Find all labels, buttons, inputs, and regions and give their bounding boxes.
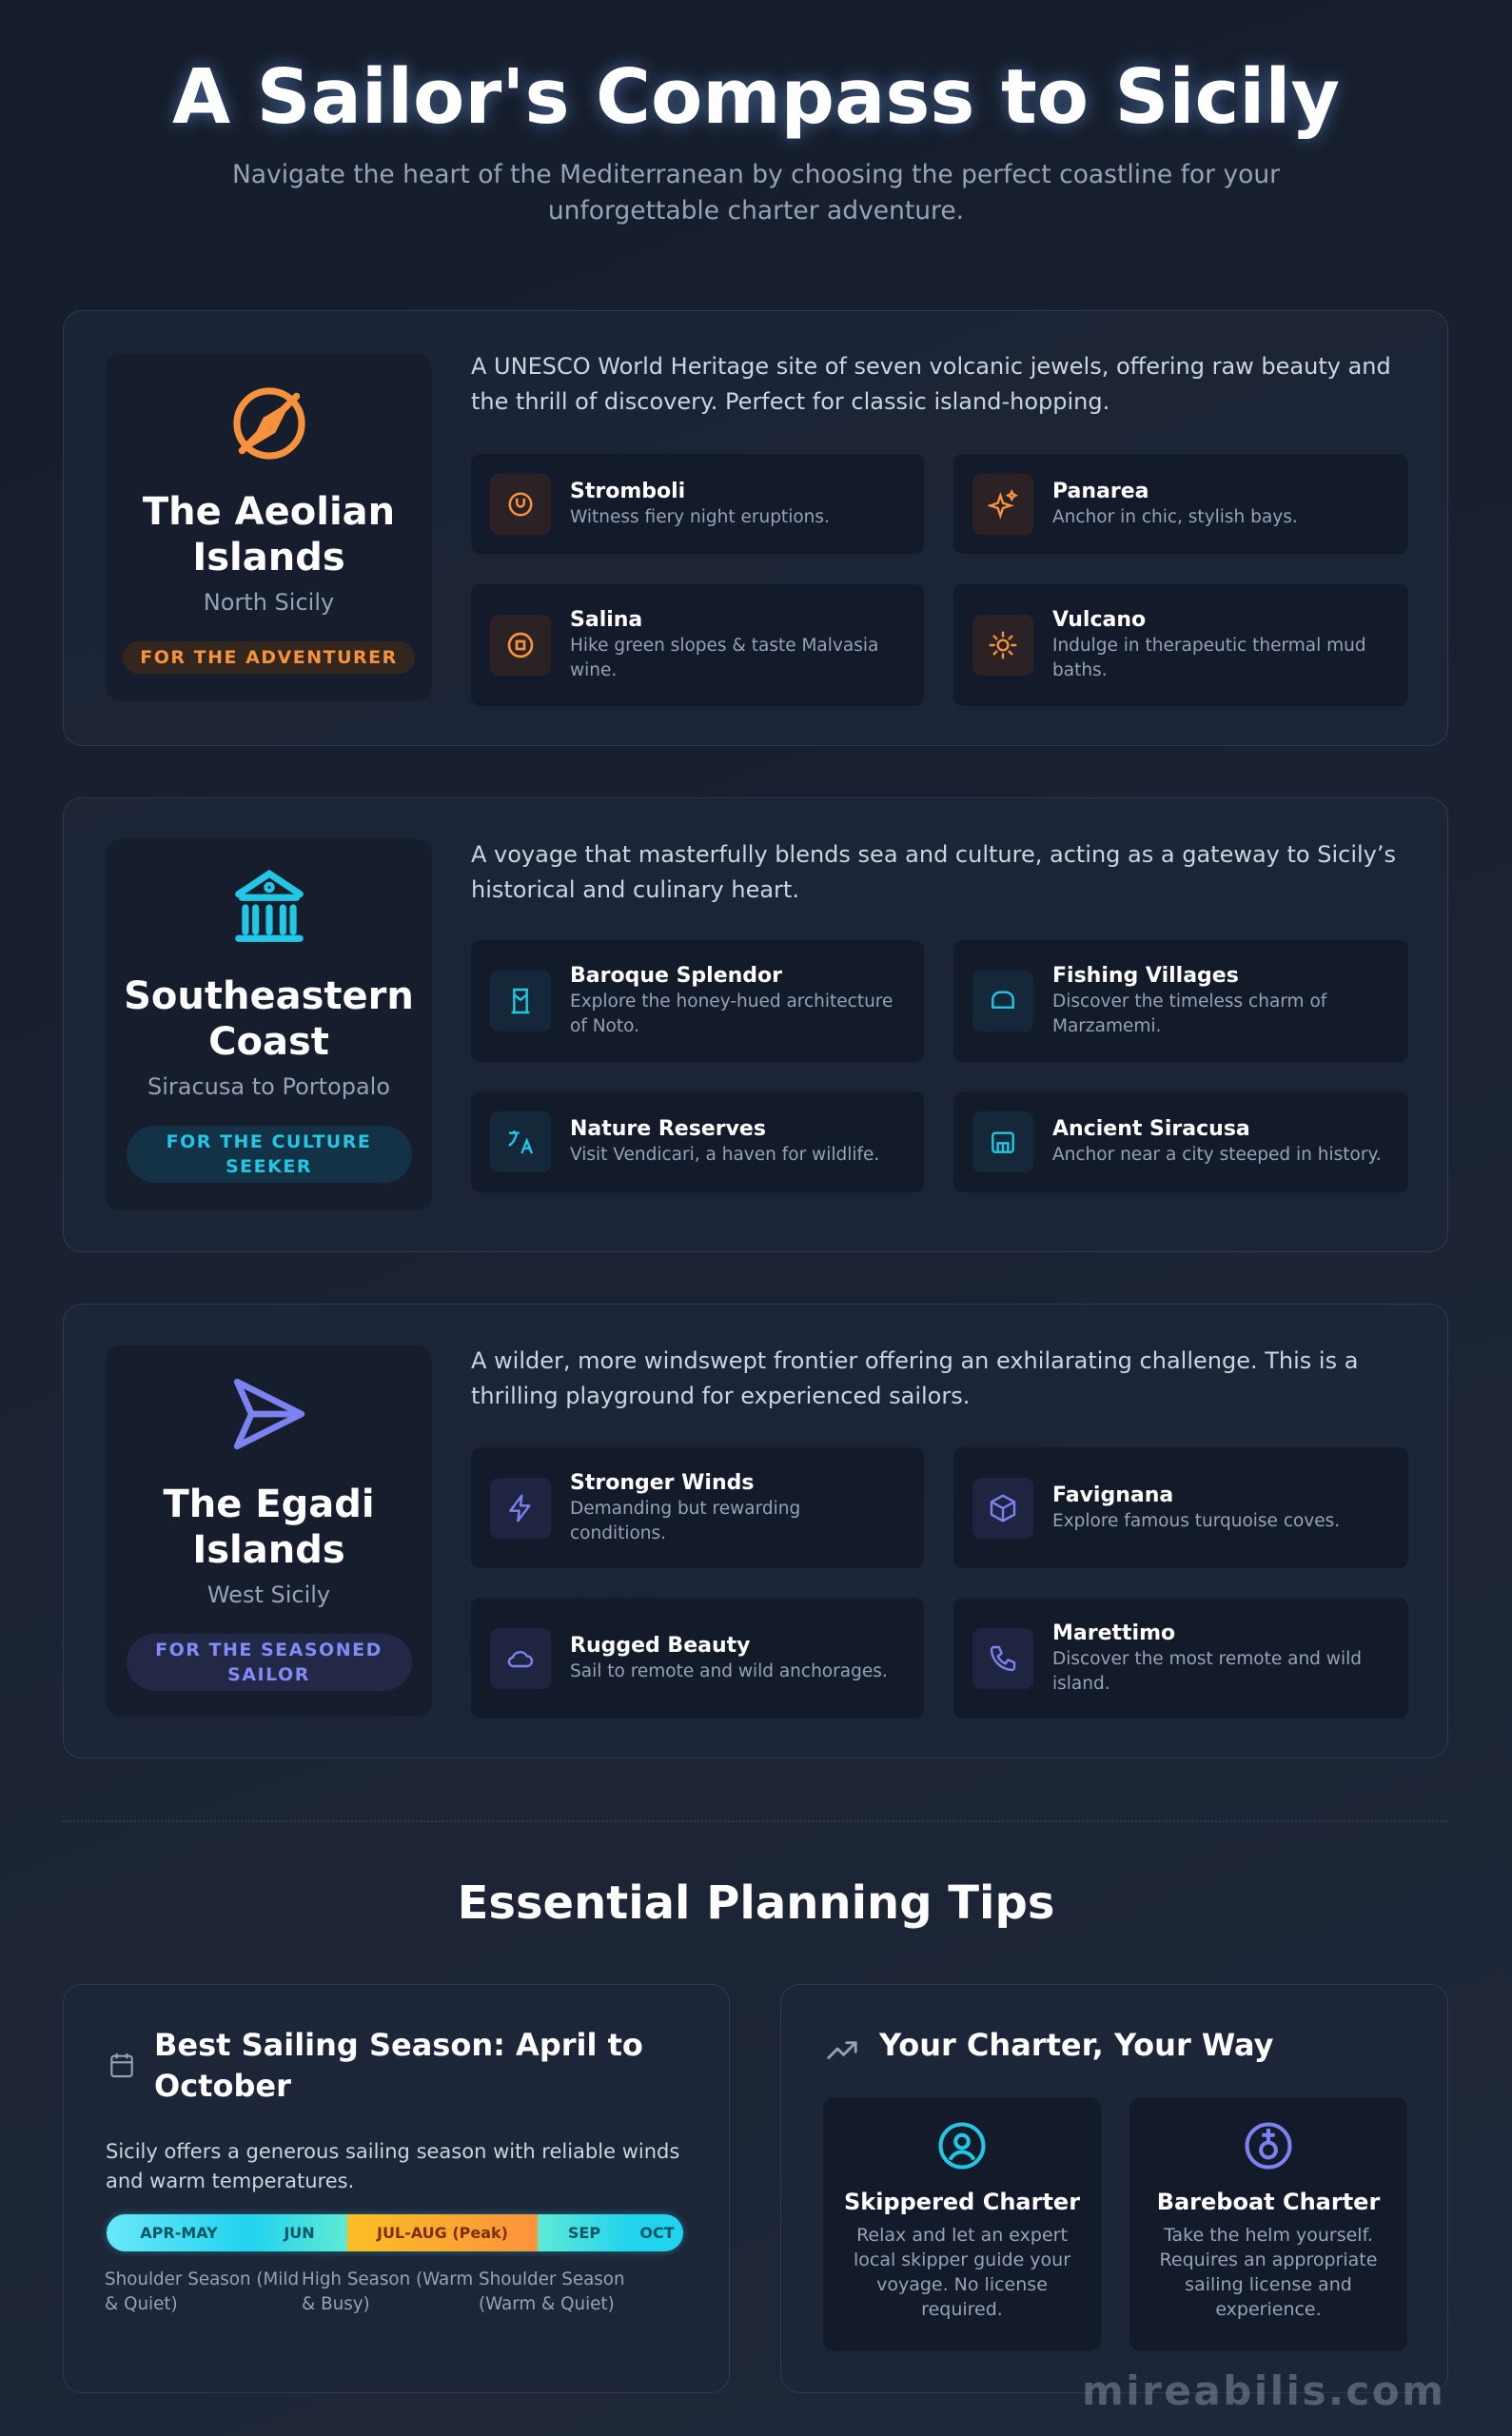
left card: egadi: West Sicily <box>207 1581 330 1608</box>
heading: essential planning tips: Essential Planning Tips <box>458 1876 1054 1930</box>
season labels <box>105 2269 625 2314</box>
panel: aeolian islands <box>63 310 1448 746</box>
card: baroque <box>471 940 924 1062</box>
icon: trending <box>827 2041 857 2059</box>
card: vulcano <box>953 584 1408 706</box>
card: vulcano: Indulge in therapeutic thermal mud baths. <box>1052 636 1366 680</box>
card: marettimo: Marettimo <box>1052 1621 1175 1644</box>
heading: season: Best Sailing Season: April to October <box>154 2027 643 2104</box>
card: fishing villages <box>953 940 1408 1062</box>
card: ancient siracusa: Anchor near a city steeped in history. <box>1052 1145 1382 1165</box>
left card: southeastern: Southeastern <box>124 974 414 1018</box>
card: fishing villages: Fishing Villages <box>1052 964 1239 988</box>
card: nature reserves <box>471 1091 924 1192</box>
season bar <box>107 2214 683 2251</box>
panel: southeastern coast <box>63 797 1448 1252</box>
icon: calendar <box>110 2053 133 2078</box>
season labels: Shoulder Season (Mild <box>105 2269 299 2289</box>
description: A UNESCO World Heritage site of seven volcanic jewels, offering raw beauty and the thrill of discovery. Perfect for classic island-hopping. <box>471 353 1391 415</box>
card: bareboat charter: Take the helm yourself. Requires an appropriate sailing license and experience. <box>1160 2225 1377 2320</box>
card: favignana: Favignana <box>1052 1483 1173 1507</box>
season bar: JUN <box>284 2224 315 2242</box>
card: stronger winds <box>471 1447 924 1568</box>
card: skippered charter: Skippered Charter <box>844 2189 1080 2215</box>
card: panarea <box>953 454 1408 554</box>
season labels: & Busy) <box>302 2294 370 2314</box>
panel: sailing season <box>63 1984 730 2393</box>
left card: aeolian <box>106 354 432 701</box>
card: stromboli: Witness fiery night eruptions. <box>570 506 830 527</box>
text: season description: Sicily offers a generous sailing season with reliable winds and warm temperatures. <box>106 2140 679 2192</box>
left card: southeastern: SEEKER <box>226 1156 312 1177</box>
card: stromboli <box>471 454 924 554</box>
left card: egadi <box>106 1346 432 1717</box>
card: fishing villages: Discover the timeless charm of Marzamemi. <box>1052 992 1326 1036</box>
season labels: High Season (Warm <box>302 2269 473 2289</box>
left card: aeolian: North Sicily <box>204 588 334 615</box>
season bar: APR-MAY <box>140 2224 218 2242</box>
left card: egadi: FOR THE SEASONED <box>155 1640 383 1660</box>
card: favignana <box>953 1447 1408 1568</box>
card: stromboli: Stromboli <box>570 480 685 502</box>
card: salina: Hike green slopes & taste Malvasia wine. <box>570 636 878 680</box>
description: A wilder, more windswept frontier offering an exhilarating challenge. This is a thrilling playground for experienced sailors. <box>471 1347 1358 1409</box>
card: bareboat charter <box>1129 2097 1407 2351</box>
card: panarea: Panarea <box>1052 480 1149 502</box>
card: vulcano: Vulcano <box>1052 608 1146 632</box>
left card: southeastern: Coast <box>208 1020 329 1064</box>
card: rugged beauty: Sail to remote and wild anchorages. <box>570 1661 888 1680</box>
left card: southeastern: Siracusa to Portopalo <box>147 1073 390 1100</box>
card: rugged beauty: Rugged Beauty <box>570 1633 750 1658</box>
card: marettimo <box>953 1598 1408 1719</box>
watermark: mireabilis.com <box>1082 2367 1445 2414</box>
card: baroque: Baroque Splendor <box>570 964 782 988</box>
icon: send <box>234 1378 304 1450</box>
season labels: (Warm & Quiet) <box>479 2294 615 2314</box>
season bar: JUL-AUG (Peak) <box>377 2224 508 2242</box>
left card: egadi: Islands <box>192 1528 345 1572</box>
card: ancient siracusa: Ancient Siracusa <box>1052 1117 1250 1141</box>
left card: aeolian: FOR THE ADVENTURER <box>140 647 398 668</box>
left card: southeastern <box>106 839 432 1210</box>
season labels: Shoulder Season <box>479 2269 625 2289</box>
season bar: SEP <box>568 2224 600 2242</box>
left card: southeastern: FOR THE CULTURE <box>167 1131 371 1152</box>
icon: compass <box>233 387 305 460</box>
left card: aeolian: Islands <box>192 535 345 579</box>
card: salina: Salina <box>570 608 642 632</box>
title: A Sailor's Compass to Sicily <box>172 53 1340 141</box>
panel: charter <box>780 1984 1448 2393</box>
card: nature reserves: Nature Reserves <box>570 1117 766 1141</box>
card: salina <box>471 584 924 706</box>
season labels: & Quiet) <box>105 2294 178 2314</box>
card: panarea: Anchor in chic, stylish bays. <box>1052 506 1298 527</box>
description: A voyage that masterfully blends sea and culture, acting as a gateway to Sicily’s historical and culinary heart. <box>471 841 1396 903</box>
card: rugged beauty <box>471 1598 924 1719</box>
subtitle: Navigate the heart of the Mediterranean by choosing the perfect coastline for your unforgettable charter adventure. <box>232 160 1280 226</box>
card: baroque: Explore the honey-hued architecture of Noto. <box>570 992 893 1036</box>
card: skippered charter <box>823 2097 1101 2351</box>
panel: egadi islands <box>63 1304 1448 1758</box>
card: ancient siracusa <box>953 1091 1408 1192</box>
heading: charter: Your Charter, Your Way <box>879 2027 1273 2063</box>
card: stronger winds: Stronger Winds <box>570 1471 754 1494</box>
left card: egadi: SAILOR <box>227 1664 310 1685</box>
card: nature reserves: Visit Vendicari, a haven for wildlife. <box>570 1145 879 1165</box>
season bar: OCT <box>639 2224 675 2242</box>
card: stronger winds: Demanding but rewarding conditions. <box>570 1498 800 1543</box>
card: marettimo: Discover the most remote and wild island. <box>1052 1648 1362 1694</box>
card: skippered charter: Relax and let an expert local skipper guide your voyage. No license required. <box>854 2225 1070 2320</box>
card: favignana: Explore famous turquoise coves. <box>1052 1511 1340 1530</box>
card: bareboat charter: Bareboat Charter <box>1157 2189 1380 2215</box>
left card: egadi: The Egadi <box>163 1483 375 1526</box>
left card: aeolian: The Aeolian <box>143 489 395 533</box>
icon: landmark <box>235 870 304 942</box>
